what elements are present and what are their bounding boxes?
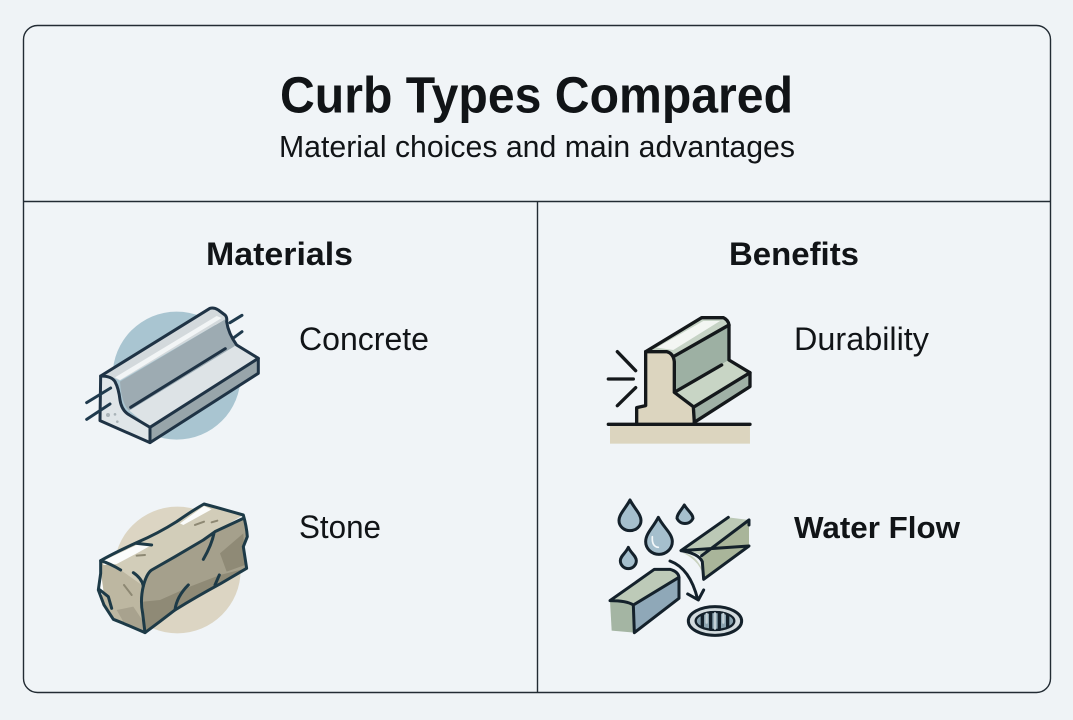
label: water flow: Water Flow [794, 510, 961, 545]
panel: materials [87, 236, 429, 633]
heading: materials: Materials [206, 236, 353, 272]
icon: water flow [610, 500, 749, 635]
subtitle: Material choices and main advantages [279, 130, 795, 164]
label: stone: Stone [299, 509, 381, 545]
icon: stone curb [98, 504, 247, 633]
icon: drain grate [688, 607, 742, 635]
heading: benefits: Benefits [729, 236, 859, 272]
label: durability: Durability [794, 321, 929, 357]
title: Curb Types Compared [280, 66, 793, 124]
label: concrete: Concrete [299, 321, 429, 357]
icon: concrete curb [87, 308, 258, 443]
panel: benefits [608, 236, 961, 635]
icon: durable curb [608, 318, 750, 444]
